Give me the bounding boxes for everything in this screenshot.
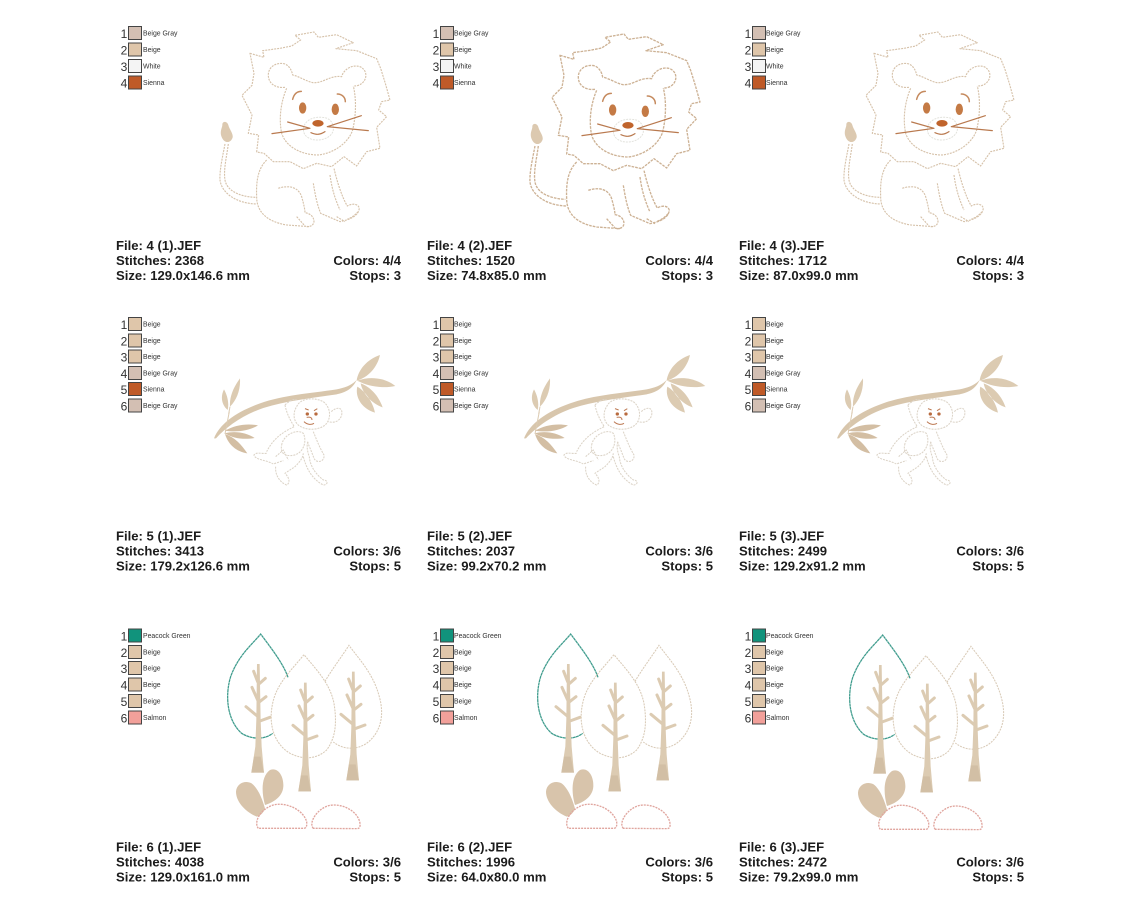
color legend: Sienna [766, 386, 788, 394]
panel: design 4 (2) [427, 26, 714, 283]
color legend: Beige [143, 47, 161, 54]
file info: Stitches: 3413 [116, 544, 204, 558]
color legend: Beige Gray [143, 370, 178, 378]
file info: Colors: 4/4 [333, 253, 402, 268]
file info: Colors: 3/6 [333, 544, 401, 558]
color legend: 6 [745, 400, 752, 414]
color legend: Beige [143, 682, 161, 689]
color legend: 2 [433, 334, 440, 348]
color legend: Sienna [143, 80, 165, 87]
color legend: White [143, 64, 161, 70]
file info: Size: 99.2x70.2 mm [427, 558, 546, 574]
color legend: Peacock Green [766, 633, 814, 640]
color legend: 4 [121, 678, 128, 692]
color legend: 4 [745, 678, 752, 692]
trees embroidery [228, 634, 382, 829]
color legend: Beige [454, 698, 472, 706]
color legend [121, 26, 178, 90]
color legend: 5 [433, 383, 440, 397]
color legend: Beige [143, 650, 161, 656]
color legend: 2 [121, 44, 128, 58]
color legend: Beige [766, 354, 784, 361]
file info: Size: 129.0x146.6 mm [116, 268, 250, 283]
file info: Stitches: 2472 [739, 854, 827, 870]
trees embroidery [538, 634, 692, 829]
file info: Stops: 5 [661, 558, 713, 574]
file info: File: 4 (2).JEF [427, 238, 512, 253]
color legend [745, 318, 801, 414]
color legend: Beige [766, 666, 784, 672]
lion embroidery [844, 32, 1014, 227]
color legend: 2 [433, 44, 440, 58]
panel: design 6 (2) [427, 629, 713, 884]
color legend [433, 629, 502, 726]
color legend: 5 [745, 695, 752, 709]
color legend: Beige [766, 698, 784, 706]
color legend: Beige [454, 338, 472, 345]
file info: Stops: 3 [972, 268, 1024, 283]
color legend [745, 629, 814, 726]
monkey on branch embroidery [837, 355, 1018, 485]
color legend: White [766, 64, 784, 70]
color legend: 4 [745, 76, 752, 90]
color legend [433, 26, 489, 90]
color legend: 6 [745, 712, 752, 726]
color legend: Beige [143, 354, 161, 361]
file info [427, 528, 713, 574]
color legend: 3 [745, 60, 752, 74]
color legend: Sienna [143, 386, 165, 394]
color legend: 2 [745, 44, 752, 58]
file info [739, 840, 1024, 884]
color legend [121, 318, 178, 414]
color legend: Peacock Green [454, 633, 502, 640]
color legend: Beige [454, 322, 472, 328]
color legend: 4 [121, 367, 128, 381]
file info: File: 5 (2).JEF [427, 528, 512, 544]
color legend: 3 [121, 350, 128, 364]
color legend: 3 [433, 350, 440, 364]
color legend: 3 [745, 350, 752, 364]
color legend: Beige [454, 650, 472, 656]
file info: Size: 129.2x91.2 mm [739, 558, 866, 574]
file info [739, 238, 1025, 283]
color legend: 1 [121, 27, 128, 41]
color legend: 6 [433, 712, 440, 726]
color legend: Beige Gray [766, 403, 801, 410]
color legend: 3 [745, 662, 752, 676]
color legend: 1 [433, 630, 440, 644]
color legend: 3 [121, 60, 128, 74]
color legend: Beige Gray [766, 30, 801, 38]
panel: design 4 (1) [116, 26, 402, 283]
color legend: 2 [745, 334, 752, 348]
color legend: 5 [433, 695, 440, 709]
color legend: 4 [433, 76, 440, 90]
color legend: 3 [121, 662, 128, 676]
file info: Size: 87.0x99.0 mm [739, 268, 858, 283]
file info: Stops: 5 [972, 558, 1024, 574]
color legend: Peacock Green [143, 633, 191, 640]
color legend: 6 [433, 400, 440, 414]
color legend: 4 [433, 367, 440, 381]
color legend: 5 [745, 383, 752, 397]
file info: Size: 129.0x161.0 mm [116, 870, 250, 884]
file info: Colors: 3/6 [956, 544, 1024, 558]
color legend: Beige [143, 338, 161, 345]
file info [427, 238, 714, 283]
color legend: 6 [121, 400, 128, 414]
trees embroidery [850, 635, 1004, 830]
panel: design 5 (1) [116, 318, 401, 574]
color legend: Beige [143, 322, 161, 328]
color legend: Salmon [143, 715, 167, 722]
file info: Stops: 5 [661, 870, 713, 884]
file info: Colors: 4/4 [645, 253, 714, 268]
color legend: Beige [766, 322, 784, 328]
color legend: 1 [745, 27, 752, 41]
color legend: Beige [766, 682, 784, 689]
panel: design 5 (2) [427, 318, 713, 574]
color legend: Sienna [454, 386, 476, 394]
file info: Stops: 5 [972, 870, 1024, 884]
color legend: Beige [454, 666, 472, 672]
file info: Size: 79.2x99.0 mm [739, 870, 858, 884]
color legend: 4 [433, 678, 440, 692]
file info: Colors: 4/4 [956, 253, 1025, 268]
color legend: Sienna [766, 80, 788, 87]
file info: File: 4 (3).JEF [739, 238, 824, 253]
file info: Stitches: 2368 [116, 253, 204, 268]
color legend: 2 [121, 646, 128, 660]
file info [427, 840, 713, 884]
color legend: Salmon [766, 715, 790, 722]
color legend: 1 [745, 630, 752, 644]
panel: design 6 (3) [739, 629, 1024, 884]
file info: Stitches: 2499 [739, 544, 827, 558]
file info [116, 238, 402, 283]
file info: Stitches: 1520 [427, 253, 515, 268]
color legend: Beige [766, 338, 784, 345]
file info: File: 5 (1).JEF [116, 528, 201, 544]
color legend: 5 [121, 383, 128, 397]
color legend [745, 26, 801, 90]
file info: Stitches: 2037 [427, 544, 515, 558]
color legend: 1 [745, 318, 752, 332]
file info: Colors: 3/6 [645, 854, 713, 870]
file info: File: 6 (1).JEF [116, 840, 201, 854]
color legend: Beige [766, 47, 784, 54]
color legend: Beige Gray [454, 30, 489, 38]
file info: File: 4 (1).JEF [116, 238, 201, 253]
file info [116, 528, 401, 574]
file info: Stops: 5 [349, 558, 401, 574]
color legend: 2 [745, 646, 752, 660]
file info: Stops: 3 [349, 268, 401, 283]
color legend: 1 [433, 27, 440, 41]
panel: design 6 (1) [116, 629, 401, 884]
file info: Stops: 3 [661, 268, 713, 283]
color legend: 5 [121, 695, 128, 709]
color legend: 2 [433, 646, 440, 660]
color legend: 1 [433, 318, 440, 332]
color legend: 6 [121, 712, 128, 726]
file info: Colors: 3/6 [333, 854, 401, 870]
file info: Size: 64.0x80.0 mm [427, 870, 546, 884]
file info: Size: 74.8x85.0 mm [427, 268, 546, 283]
color legend: 2 [121, 334, 128, 348]
color legend: Beige Gray [143, 403, 178, 410]
color legend: Beige [143, 698, 161, 706]
color legend: Beige [454, 682, 472, 689]
lion embroidery [530, 34, 700, 229]
color legend [433, 318, 489, 414]
file info: Stitches: 1712 [739, 253, 827, 268]
color legend: Beige [143, 666, 161, 672]
color legend: White [454, 64, 472, 70]
file info: Colors: 3/6 [645, 544, 713, 558]
color legend: Salmon [454, 715, 478, 722]
file info: Size: 179.2x126.6 mm [116, 558, 250, 574]
color legend: 4 [745, 367, 752, 381]
color legend [121, 629, 191, 726]
panel: design 4 (3) [739, 26, 1025, 283]
panel: design 5 (3) [739, 318, 1024, 574]
file info: Stops: 5 [349, 870, 401, 884]
color legend: Beige Gray [766, 370, 801, 378]
color legend: 3 [433, 60, 440, 74]
file info: File: 6 (2).JEF [427, 840, 512, 854]
file info [116, 840, 401, 884]
lion embroidery [220, 32, 390, 227]
color legend: Beige Gray [454, 370, 489, 378]
color legend: 1 [121, 318, 128, 332]
file info: File: 6 (3).JEF [739, 840, 824, 854]
color legend: Beige [454, 354, 472, 361]
color legend: 3 [433, 662, 440, 676]
color legend: Beige [766, 650, 784, 656]
color legend: Beige [454, 47, 472, 54]
file info: Stitches: 1996 [427, 854, 515, 870]
file info: Stitches: 4038 [116, 854, 204, 870]
file info: File: 5 (3).JEF [739, 528, 824, 544]
color legend: 1 [121, 630, 128, 644]
file info [739, 528, 1024, 574]
color legend: 4 [121, 76, 128, 90]
color legend: Beige Gray [143, 30, 178, 38]
monkey on branch embroidery [524, 355, 705, 485]
monkey on branch embroidery [214, 355, 395, 485]
color legend: Sienna [454, 80, 476, 87]
color legend: Beige Gray [454, 403, 489, 410]
file info: Colors: 3/6 [956, 854, 1024, 870]
